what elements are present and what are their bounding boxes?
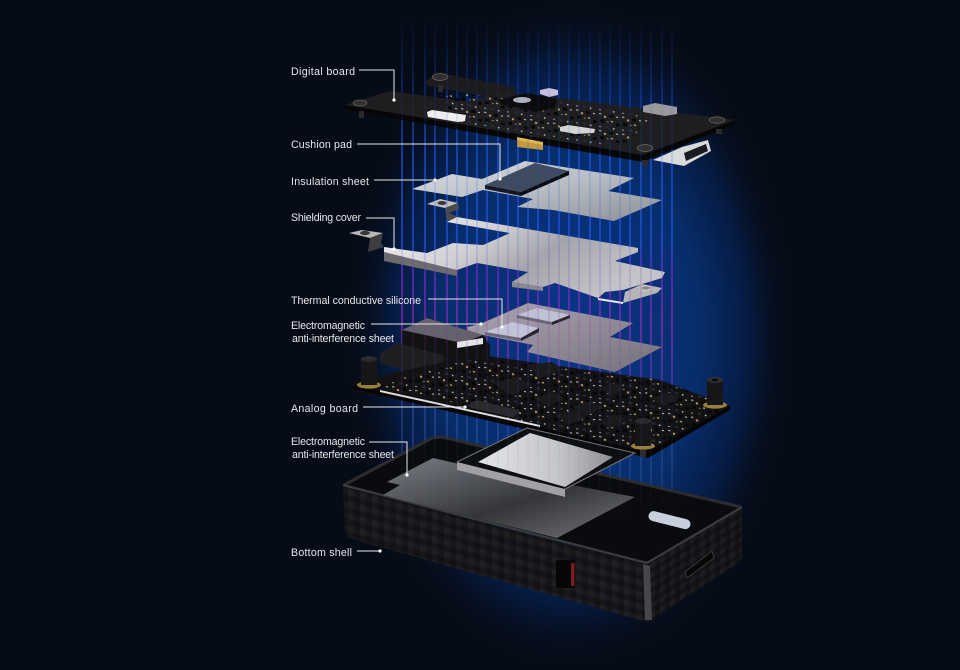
label: Insulation sheet xyxy=(291,176,437,188)
part: cushion pad xyxy=(485,163,569,196)
plate surface xyxy=(384,217,665,298)
standoff: right xyxy=(703,377,727,409)
front long face xyxy=(343,486,649,622)
beams passing over parts xyxy=(402,20,672,520)
white connector xyxy=(427,110,466,122)
USB-C port xyxy=(653,140,711,166)
label: Electromagnetic anti-interference sheet, upper: Electromagnetic xyxy=(291,320,366,332)
side face xyxy=(647,507,742,622)
board front edge xyxy=(345,105,735,162)
board edge highlight xyxy=(380,390,540,427)
button with red strip xyxy=(556,560,575,588)
shell interior xyxy=(343,436,742,565)
part: bottom shell xyxy=(343,436,742,622)
label: Electromagnetic anti-interference sheet, lower: Electromagnetic xyxy=(291,436,366,448)
blue and magenta light beams xyxy=(402,20,672,520)
components xyxy=(445,92,648,144)
standoff: front xyxy=(631,418,655,457)
right connector xyxy=(643,103,677,116)
part: shielding cover xyxy=(349,199,665,304)
standoff: left xyxy=(357,356,381,389)
plate thickness xyxy=(384,252,457,276)
main chip xyxy=(498,93,557,112)
label: Electromagnetic anti-interference sheet, upper xyxy=(291,320,483,345)
label: Analog board xyxy=(291,403,467,415)
rim front xyxy=(343,485,742,563)
part: EM anti-interference sheet, upper xyxy=(467,303,662,372)
lilac module xyxy=(540,88,558,97)
part: metal tray xyxy=(457,428,635,497)
board top strip xyxy=(425,73,515,101)
part: EM anti-interference sheet, lower xyxy=(383,458,635,538)
part: digital board xyxy=(345,73,735,166)
front mounting tab xyxy=(349,230,384,252)
slot connector xyxy=(470,400,520,418)
label: Digital board xyxy=(291,66,396,102)
corner highlight xyxy=(643,564,652,620)
shell rim back xyxy=(344,437,741,507)
label: Digital board: Digital board xyxy=(291,66,355,78)
label: Thermal conductive silicone: Thermal conductive silicone xyxy=(291,295,421,307)
board body xyxy=(345,91,735,158)
label: Thermal conductive silicone xyxy=(291,295,504,329)
label: Cushion pad: Cushion pad xyxy=(291,139,352,151)
label: Cushion pad xyxy=(291,139,502,181)
label: Electromagnetic anti-interference sheet, lower xyxy=(291,436,409,477)
label: Shielding cover xyxy=(291,212,396,251)
middle connector xyxy=(560,125,595,134)
mounting ear xyxy=(623,284,662,303)
gold block xyxy=(517,139,543,150)
side port xyxy=(685,551,714,578)
part: analog board xyxy=(353,355,730,458)
part: audio jack block xyxy=(380,318,490,390)
part: thermal conductive silicone xyxy=(485,308,570,341)
pins xyxy=(359,85,722,166)
label: Electromagnetic anti-interference sheet, lower: anti-interference sheet xyxy=(292,449,394,461)
rear mounting tab xyxy=(427,199,459,222)
part: insulation sheet xyxy=(412,161,662,221)
label: Bottom shell xyxy=(291,547,382,559)
label: Insulation sheet: Insulation sheet xyxy=(291,176,369,188)
chips xyxy=(493,362,680,428)
oval slot xyxy=(647,510,692,530)
label: Analog board: Analog board xyxy=(291,403,358,415)
label: Electromagnetic anti-interference sheet, upper: anti-interference sheet xyxy=(292,333,394,345)
label: Shielding cover: Shielding cover xyxy=(291,212,361,224)
screws xyxy=(353,74,725,151)
label: Bottom shell: Bottom shell xyxy=(291,547,352,559)
